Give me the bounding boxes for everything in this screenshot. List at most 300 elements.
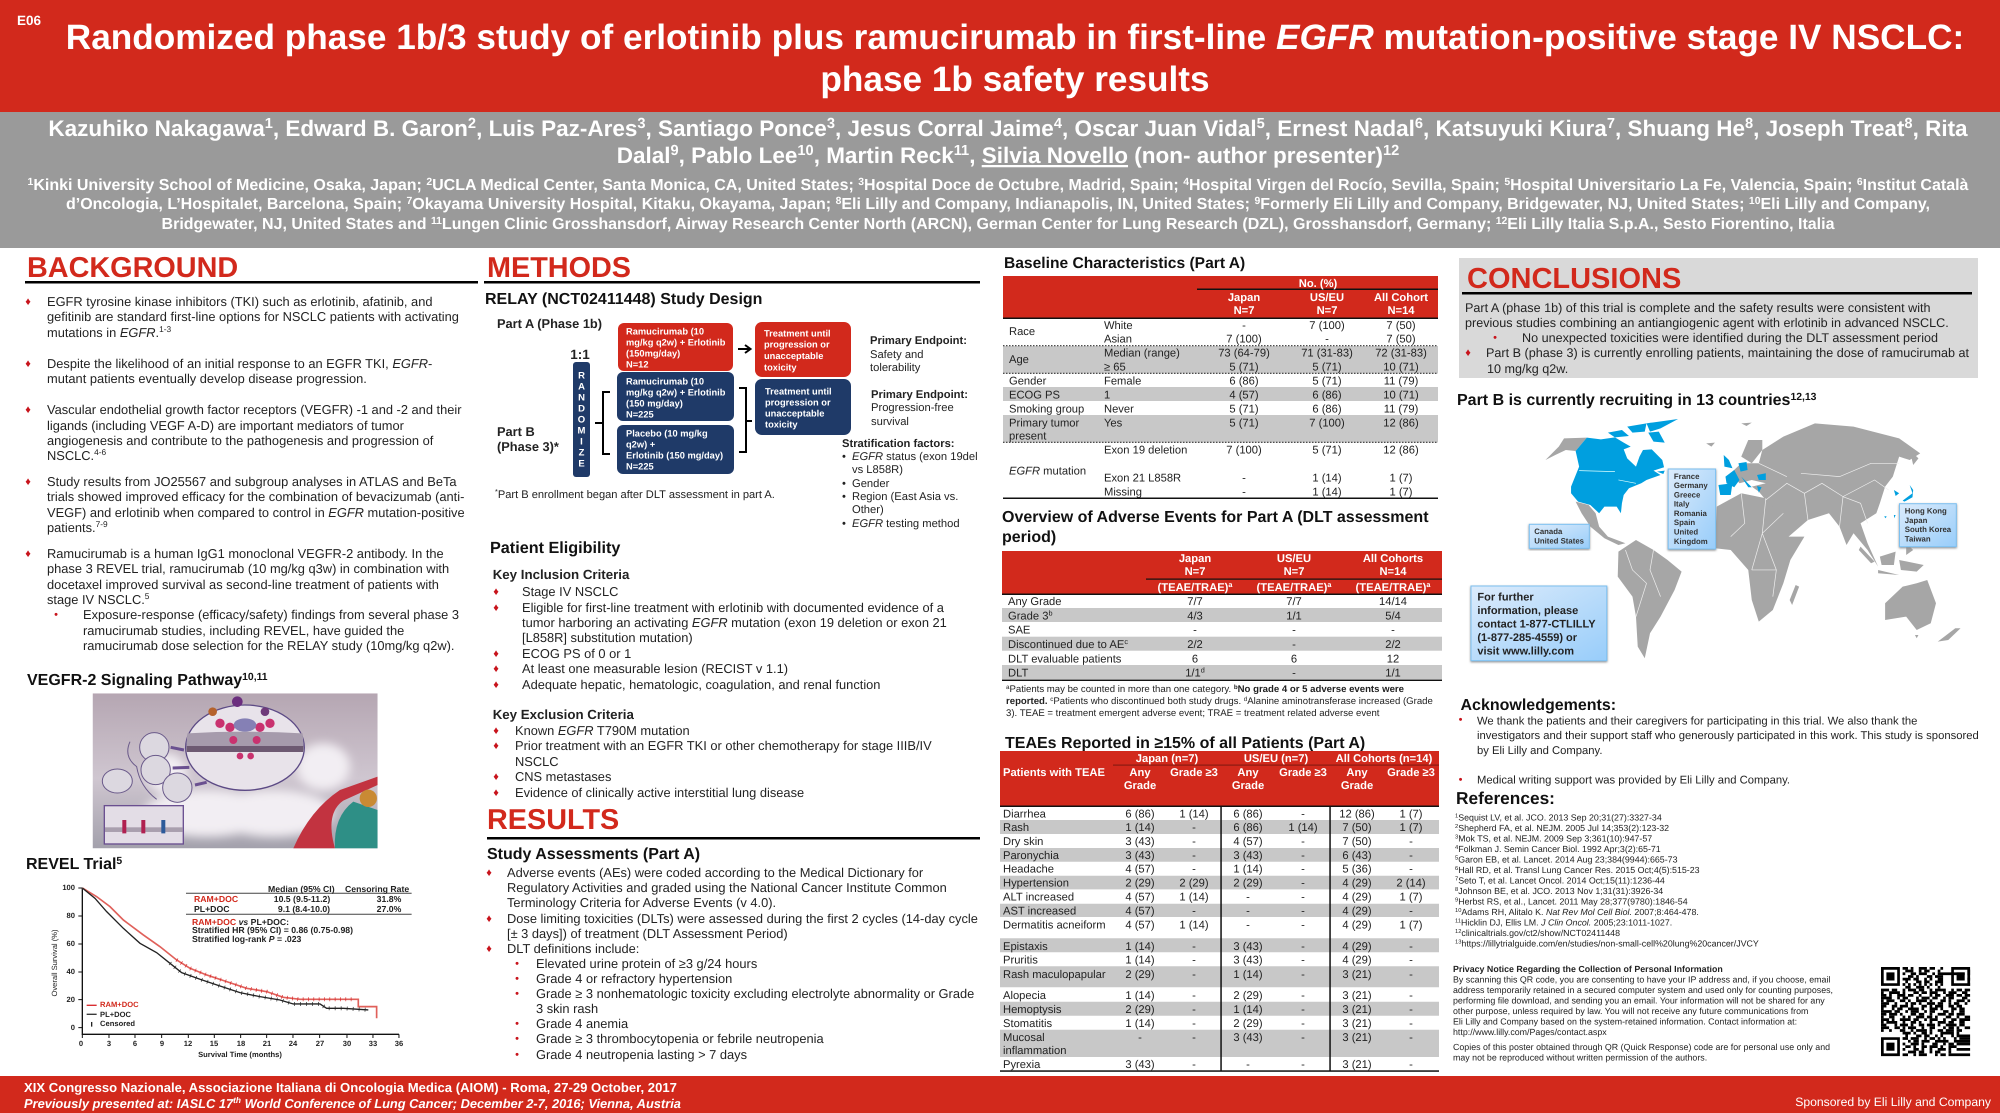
study assessments bullets: Grade ≥ 3 nonhematologic toxicity excluding electrolyte abnormality or Grade — [536, 986, 974, 1001]
background bullet 4: Study results from JO25567 and subgroup analyses in ATLAS and BeTa — [47, 474, 457, 489]
background bullet 2: mutant patients eventually develop disease progression. — [47, 371, 367, 386]
table header: All Cohorts — [1363, 553, 1423, 565]
inclusion criteria: ♦ — [493, 663, 499, 675]
acknowledgements text: by Eli Lilly and Company. — [1477, 745, 1602, 757]
acknowledgements text: We thank the patients and their caregivers for participating in this trial. We also thank the — [1477, 715, 1917, 727]
inclusion criteria: tumor harboring an activating EGFR mutation (exon 19 deletion or exon 21 — [522, 615, 947, 630]
table body: 1 (14) — [1312, 472, 1342, 484]
table body: 12 (86) — [1339, 808, 1375, 820]
table body: Dry skin — [1003, 836, 1043, 848]
table header: Japan — [1179, 553, 1211, 565]
background bullet 5: phase 3 REVEL trial, ramucirumab (10 mg/kg q3w) in combination with — [47, 561, 449, 576]
stratification factors: • — [842, 518, 846, 530]
table body: Gender — [1009, 376, 1047, 388]
table body: 3 (43) — [1233, 1032, 1263, 1044]
y axis labels: 60 — [67, 939, 75, 948]
chart stats table: RAM+DOC — [194, 894, 239, 904]
x axis labels: 27 — [316, 1039, 324, 1048]
table header: (TEAE/TRAE)a — [1257, 580, 1331, 594]
design footnote: *Part B enrollment began after DLT assessment in part A. — [495, 486, 775, 501]
table header: Any — [1346, 767, 1368, 779]
randomize bar: E — [578, 458, 585, 470]
table header: N=7 — [1185, 566, 1205, 578]
background bullet 5: ramucirumab dose selection for the RELAY study (10mg/kg q2w). — [83, 638, 454, 653]
table body: - — [1301, 892, 1305, 904]
table footnote: reported. cPatients who discontinued both study drugs. dAlanine aminotransferase increased (Grade — [1006, 696, 1433, 707]
background bullet 4: trials showed improved efficacy for the combination of bevacizumab (anti- — [47, 489, 464, 504]
subheading: study assessments: Study Assessments (Part A) — [487, 846, 700, 863]
arm box: part B placebo: Placebo (10 mg/kg — [626, 428, 708, 438]
table body: - — [1409, 1018, 1413, 1030]
table body: 7/7 — [1187, 596, 1203, 608]
reference list: 6Hall RD, et al. Transl Lung Cancer Res. 2015 Oct;4(5):515-23 — [1455, 865, 1700, 875]
table body: - — [1192, 836, 1196, 848]
y axis labels: 0 — [71, 1023, 75, 1032]
table body: 1/1 — [1385, 668, 1401, 680]
background bullet 3: NSCLC.4-6 — [47, 447, 106, 463]
table header: Patients with TEAE — [1003, 767, 1105, 779]
table body: Race — [1009, 326, 1035, 338]
y axis labels — [62, 883, 75, 1032]
meeting text: Previously presented at: IASLC 17th World Conference of Lung Cancer; December 2-7, 2016; Vienna, Austria — [24, 1095, 681, 1111]
background bullet 5: docetaxel improved survival as second-line treatment of patients with — [47, 577, 439, 592]
exclusion criteria: Key Exclusion Criteria — [493, 707, 634, 722]
callout: further information: information, please — [1477, 605, 1578, 617]
table header: Any — [1237, 767, 1259, 779]
table header: Grade — [1232, 780, 1264, 792]
table body: 4 (57) — [1125, 892, 1155, 904]
inclusion criteria — [493, 567, 947, 692]
callout: further information: contact 1-877-CTLILLY — [1477, 618, 1596, 630]
table body: 1 (7) — [1399, 808, 1423, 820]
arm box: part B treatment: progression or — [765, 398, 831, 408]
table body: - — [1301, 955, 1305, 967]
table body: - — [1301, 920, 1305, 932]
table footnote: aPatients may be counted in more than one category. bNo grade 4 or 5 adverse events were — [1006, 684, 1404, 695]
title: Randomized phase 1b/3 study of erlotinib plus ramucirumab in first-line EGFR mutation-positive stage IV NSCLC: — [66, 18, 1964, 57]
study assessments bullets: Grade 4 anemia — [536, 1016, 629, 1031]
table body: 7 (100) — [1226, 445, 1262, 457]
heading: recruiting countries: Part B is currently recruiting in 13 countries12,13 — [1457, 392, 1817, 409]
table header: N=7 — [1284, 566, 1304, 578]
table body: - — [1301, 836, 1305, 848]
table body: DLT — [1008, 668, 1028, 680]
authors: Kazuhiko Nakagawa1, Edward B. Garon2, Luis Paz-Ares3, Santiago Ponce3, Jesus Corral Jaime4, Oscar Juan Vidal5, Ernest Nadal6, Katsuyuki Kiura7, Shuang He8, Joseph Treat8, Rita — [48, 116, 1968, 141]
table body: - — [1242, 320, 1246, 332]
table header: Grade ≥3 — [1170, 767, 1218, 779]
conclusions text: • — [1493, 332, 1497, 344]
study assessments bullets: [± 3 days]) of treatment (DLT Assessment Period) — [507, 926, 788, 941]
exclusion criteria: Evidence of clinically active interstitial lung disease — [515, 785, 804, 800]
background bullet 3: ligands (including VEGF A-D) are important mediators of tumor — [47, 418, 405, 433]
table body: Dermatitis acneiform — [1003, 920, 1106, 932]
title banner — [0, 0, 2000, 112]
background bullet 1: gefitinib are standard first-line options for NSCLC patients with activating — [47, 309, 459, 324]
table body: - — [1192, 990, 1196, 1002]
randomize bar: I — [580, 436, 583, 448]
brackets — [595, 388, 752, 454]
table body: 3 (43) — [1233, 941, 1263, 953]
table body: - — [1192, 822, 1196, 834]
table body: Mucosal — [1003, 1032, 1045, 1044]
table body: Smoking group — [1009, 403, 1084, 415]
heading: adverse events overview: period) — [1002, 529, 1056, 546]
table body: 1 (7) — [1399, 920, 1423, 932]
table body: 12 (86) — [1383, 445, 1419, 457]
table body: 1/1 — [1286, 610, 1302, 622]
table body: Yes — [1104, 417, 1123, 429]
table body: 7 (100) — [1226, 334, 1262, 346]
table body: 4 (57) — [1125, 906, 1155, 918]
reference list: 12clinicaltrials.gov/ct2/show/NCT02411448 — [1455, 928, 1620, 938]
table body: 4 (29) — [1342, 906, 1372, 918]
study assessments bullets: • — [515, 1033, 519, 1045]
map label: Europe: France — [1674, 472, 1700, 481]
diagram: study design: Part B — [497, 424, 535, 439]
table body: Female — [1104, 376, 1141, 388]
background bullet 1: ♦ — [25, 296, 31, 308]
table body: AST increased — [1003, 906, 1076, 918]
table body: - — [1301, 1059, 1305, 1071]
affiliations: 1Kinki University School of Medicine, Osaka, Japan; 2UCLA Medical Center, Santa Monica, CA, United States; 3Hospital Doce de Octubre, Madrid, Spain; 4Hospital Virgen del Rocío, Sevilla, Spain; 5Hospital Universitario La Fe, Valencia, Spain; 6Institut Català — [28, 176, 1968, 194]
inclusion criteria: Stage IV NSCLC — [522, 584, 618, 599]
background bullet 5: ramucirumab studies, including REVEL, have guided the — [83, 623, 404, 638]
table header — [1002, 551, 1442, 595]
background bullet 5: Ramucirumab is a human IgG1 monoclonal VEGFR-2 antibody. In the — [47, 546, 444, 561]
chart: REVEL Kaplan-Meier survival — [50, 883, 412, 1059]
table body: 1 (14) — [1125, 941, 1155, 953]
x axis labels: 30 — [343, 1039, 351, 1048]
table header: N=14 — [1387, 305, 1415, 317]
map label: Europe: Germany — [1674, 481, 1708, 490]
table body: - — [1192, 850, 1196, 862]
privacy notice: address temporarily retained in a secured computer system and used only for counting purposes, — [1453, 985, 1833, 995]
arm box: part B ramucirumab: mg/kg q2w) + Erlotinib — [626, 388, 726, 398]
stratification factors — [842, 438, 978, 530]
table body: - — [1301, 1018, 1305, 1030]
exclusion criteria: CNS metastases — [515, 769, 611, 784]
heading: conclusions: CONCLUSIONS — [1467, 263, 1681, 295]
heading: VEGFR-2 pathway: VEGFR-2 Signaling Pathway10,11 — [27, 672, 268, 689]
study assessments bullets: • — [515, 1018, 519, 1030]
stratification factors: • — [842, 451, 846, 463]
panel: conclusions — [1459, 258, 1978, 378]
heading: background: BACKGROUND — [27, 252, 238, 284]
table body: 3 (43) — [1125, 1059, 1155, 1071]
conclusions text: No unexpected toxicities were identified during the DLT assessment period — [1522, 331, 1938, 345]
table body: - — [1138, 1032, 1142, 1044]
table body: 73 (64-79) — [1218, 348, 1270, 360]
table body: 1 (14) — [1233, 969, 1263, 981]
table body: 1 (14) — [1125, 822, 1155, 834]
table body: 1 — [1104, 389, 1110, 401]
map label: Europe: Italy — [1674, 500, 1690, 508]
reference list: 10Adams RH, Alitalo K. Nat Rev Mol Cell Biol. 2007;8:464-478. — [1455, 907, 1699, 917]
arm box: part B placebo: Erlotinib (150 mg/day) — [626, 450, 723, 460]
background bullet 4: patients.7-9 — [47, 519, 108, 535]
x axis labels: 3 — [107, 1039, 111, 1048]
map label: Europe: United — [1674, 528, 1698, 536]
arm box: part B treatment: Treatment until — [765, 386, 832, 396]
reference list: 1Sequist LV, et al. JCO. 2013 Sep 20;31(27):3327-34 — [1455, 812, 1662, 822]
conclusions text: Part B (phase 3) is currently enrolling patients, maintaining the dose of ramucirumab at — [1486, 346, 1970, 360]
table body: 3 (43) — [1233, 955, 1263, 967]
table body: 3 (21) — [1342, 1032, 1372, 1044]
primary endpoint B: Primary Endpoint: — [871, 389, 968, 401]
table body: 5 (71) — [1312, 445, 1342, 457]
randomize bar — [573, 362, 590, 477]
arm box: part A treatment: progression or — [764, 340, 830, 350]
chart legend: Censored — [100, 1019, 135, 1028]
study assessments bullets: • — [515, 958, 519, 970]
heading: results: RESULTS — [487, 804, 619, 836]
table body: - — [1192, 969, 1196, 981]
background bullet 5: stage IV NSCLC.5 — [47, 591, 149, 607]
table body: Grade 3b — [1008, 608, 1052, 622]
table header: (TEAE/TRAE)a — [1158, 580, 1232, 594]
table body: Rash — [1003, 822, 1029, 834]
map label: Europe: Spain — [1674, 518, 1695, 527]
exclusion criteria: Prior treatment with an EGFR TKI or other chemotherapy for stage IIIB/IV — [515, 738, 932, 753]
callout: further information: (1-877-285-4559) or — [1477, 632, 1578, 644]
primary endpoint A — [870, 335, 967, 374]
arm box: part B ramucirumab — [617, 372, 734, 421]
table header: N=7 — [1234, 305, 1254, 317]
table body: White — [1104, 320, 1133, 332]
table body: SAE — [1008, 625, 1030, 637]
study assessments bullets: Adverse events (AEs) were coded according to the Medical Dictionary for — [507, 865, 924, 880]
privacy notice: may not be reproduced without written permission of the authors. — [1453, 1052, 1707, 1062]
table body: Epistaxis — [1003, 941, 1048, 953]
x axis labels: 24 — [289, 1039, 298, 1048]
table body — [1003, 320, 1438, 499]
table footnote: 3). TEAE = treatment emergent adverse event; TRAE = treatment related adverse event — [1006, 708, 1380, 719]
callout: further information: visit www.lilly.com — [1477, 645, 1574, 657]
table body: 1 (14) — [1312, 486, 1342, 498]
diagram: study design: (Phase 3)* — [497, 439, 559, 454]
country borders — [1625, 463, 1899, 617]
table header: Grade ≥3 — [1387, 767, 1435, 779]
study assessments bullets: • — [515, 1049, 519, 1061]
table body: - — [1192, 864, 1196, 876]
conclusions text: Part A (phase 1b) of this trial is complete and the safety results were consistent with — [1465, 301, 1930, 315]
privacy notice: http://www.lilly.com/Pages/contact.aspx — [1453, 1027, 1607, 1037]
privacy notice: Copies of this poster obtained through QR (Quick Response) code are for personal use only and — [1453, 1042, 1830, 1052]
chart stats table: Median (95% CI) — [268, 884, 335, 894]
background bullet 4: ♦ — [25, 476, 31, 488]
x axis labels: 15 — [210, 1039, 219, 1048]
reference list: 13https://lillytrialguide.com/en/studies/non-small-cell%20lung%20cancer/JVCY — [1455, 939, 1759, 949]
table body: 4 (29) — [1342, 955, 1372, 967]
panel: adverse events overview — [1002, 509, 1442, 719]
table body: - — [1409, 955, 1413, 967]
table body: Never — [1104, 403, 1134, 415]
table header: Japan (n=7) — [1136, 753, 1199, 765]
arm box: part B placebo — [617, 425, 734, 474]
arm box: part A ramucirumab: mg/kg q2w) + Erlotinib — [626, 338, 726, 348]
reference list: 11Hicklin DJ, Ellis LM. J Clin Oncol. 2005;23:1011-1027. — [1455, 918, 1672, 928]
affiliations: Bridgewater, NJ, United States and 11Lungen Clinic Grosshansdorf, Airway Research Center North (ARCN), German Center for Lung Research (DZL), Grosshansdorf, Germany; 12Eli Lilly Italia S.p.A., Sesto Fiorentino, Italia — [162, 216, 1834, 233]
randomize bar: M — [578, 426, 586, 436]
table body: 11 (79) — [1384, 376, 1419, 388]
table body: - — [1246, 1059, 1250, 1071]
stratification factors: Other) — [852, 504, 884, 516]
chart stats table: 31.8% — [377, 894, 402, 904]
table body: EGFR mutation — [1009, 465, 1086, 477]
table body: 7 (100) — [1309, 320, 1345, 332]
table body: - — [1246, 920, 1250, 932]
inclusion criteria: ECOG PS of 0 or 1 — [522, 646, 631, 661]
table body: 2 (14) — [1396, 878, 1426, 890]
table body: 1 (7) — [1399, 822, 1423, 834]
heading: adverse events overview: Overview of Adverse Events for Part A (DLT assessment — [1002, 509, 1429, 526]
table body: 5 (71) — [1312, 362, 1342, 374]
inclusion criteria: Eligible for first-line treatment with erlotinib with documented evidence of a — [522, 600, 945, 615]
table body: 1 (14) — [1233, 864, 1263, 876]
map label: North America — [1529, 524, 1589, 548]
table body: 7 (50) — [1386, 334, 1416, 346]
chart legend: RAM+DOC — [100, 1000, 139, 1009]
randomize bar: A — [578, 382, 585, 392]
conclusions text: previous studies combining an antiangiogenic agent with erlotinib in advanced NSCLC. — [1465, 316, 1949, 330]
heading: TEAEs: TEAEs Reported in ≥15% of all Patients (Part A) — [1005, 735, 1365, 752]
panel: TEAEs table — [1000, 735, 1439, 1072]
table header — [1000, 751, 1439, 807]
exclusion criteria: NSCLC — [515, 754, 559, 769]
exclusion criteria: ♦ — [493, 725, 499, 737]
table body: 3 (43) — [1233, 850, 1263, 862]
x axis labels: 9 — [160, 1039, 164, 1048]
reference list: 5Garon EB, et al. Lancet. 2014 Aug 23;384(9944):665-73 — [1455, 854, 1678, 864]
acknowledgements text: investigators and their support staff who generously participated in this work. This study is sponsored — [1477, 730, 1979, 742]
exclusion criteria: ♦ — [493, 787, 499, 799]
table body: - — [1242, 486, 1246, 498]
table body: - — [1301, 850, 1305, 862]
stratification factors: EGFR testing method — [852, 518, 960, 530]
y axis labels: 100 — [62, 883, 75, 892]
map label: Asia: Hong Kong — [1905, 507, 1947, 516]
table header: US/EU — [1310, 292, 1344, 304]
table body: Pruritis — [1003, 955, 1038, 967]
table body: Hemoptysis — [1003, 1004, 1062, 1016]
table header: Grade ≥3 — [1279, 767, 1327, 779]
title: phase 1b safety results — [820, 60, 1210, 99]
study assessments bullets: ♦ — [486, 867, 492, 879]
study assessments bullets: Regulatory Activities and graded using the National Cancer Institute Common — [507, 880, 947, 895]
table body: - — [1301, 878, 1305, 890]
panel: results — [486, 804, 980, 1062]
table body: ALT increased — [1003, 892, 1074, 904]
table body: - — [1409, 864, 1413, 876]
privacy notice — [1453, 964, 1833, 1062]
stratification factors: EGFR status (exon 19del — [852, 451, 978, 463]
reference list: 4Folkman J. Semin Cancer Biol. 1992 Apr;3(2):65-71 — [1455, 844, 1661, 854]
table body: - — [1409, 941, 1413, 953]
table body: ECOG PS — [1009, 389, 1060, 401]
primary endpoint A: tolerability — [870, 362, 921, 374]
acknowledgements text: • — [1459, 714, 1463, 726]
table body: 3 (21) — [1342, 969, 1372, 981]
table body: inflammation — [1003, 1045, 1066, 1057]
table body: 5 (71) — [1229, 362, 1259, 374]
table body: 2 (29) — [1125, 969, 1155, 981]
table body: present — [1009, 431, 1047, 443]
table header: N=14 — [1379, 566, 1407, 578]
chart stats table: Stratified HR (95% CI) = 0.86 (0.75-0.98) — [192, 925, 353, 935]
background bullet 5: • — [54, 609, 58, 621]
table body: - — [1292, 668, 1296, 680]
table body: 6 (86) — [1312, 389, 1342, 401]
inclusion criteria: ♦ — [493, 679, 499, 691]
chart stats table: Stratified log-rank P = .023 — [192, 934, 302, 944]
privacy notice: performing file download, and sending you an email. Your information will not be shared for any — [1453, 996, 1825, 1006]
table body: 1 (14) — [1125, 990, 1155, 1002]
table body: 10 (71) — [1383, 362, 1419, 374]
table body: Hypertension — [1003, 878, 1069, 890]
conclusions text — [1465, 301, 1970, 376]
callout: further information — [1471, 586, 1607, 661]
primary endpoint B — [871, 389, 968, 428]
stratification factors: Region (East Asia vs. — [852, 491, 958, 503]
table body: Exon 21 L858R — [1104, 472, 1181, 484]
land masses — [1545, 423, 1961, 658]
table body: 6 (86) — [1312, 403, 1342, 415]
table body: 7 (100) — [1309, 417, 1345, 429]
map label: Europe: Greece — [1674, 490, 1701, 500]
table header: N=7 — [1317, 305, 1337, 317]
map label: Asia: South Korea — [1905, 525, 1952, 534]
panel: references — [1455, 788, 1759, 949]
study assessments bullets: Terminology Criteria for Adverse Events (v 4.0). — [507, 895, 776, 910]
map label: Asia: Taiwan — [1905, 534, 1931, 543]
chart stats table: 9.1 (8.4-10.0) — [278, 904, 330, 914]
arm box: part B treatment: toxicity — [765, 420, 798, 430]
table body: Asian — [1104, 334, 1132, 346]
y axis labels: 80 — [67, 911, 75, 920]
table body: 11 (79) — [1384, 403, 1419, 415]
conclusions text: 10 mg/kg q2w. — [1487, 362, 1568, 376]
arm box: part A treatment — [755, 322, 851, 377]
table header: All Cohorts (n=14) — [1336, 753, 1433, 765]
background bullet 5: Exposure-response (efficacy/safety) findings from several phase 3 — [83, 607, 459, 622]
heading: baseline characteristics: Baseline Characteristics (Part A) — [1004, 255, 1245, 272]
table header: Japan — [1228, 292, 1260, 304]
table body: Median (range) — [1104, 348, 1180, 360]
table header: US/EU — [1277, 553, 1311, 565]
table body: 6 (86) — [1233, 808, 1263, 820]
table body: - — [1391, 625, 1395, 637]
map label: North America: Canada — [1534, 527, 1563, 536]
table body: - — [1192, 1032, 1196, 1044]
stratification factors: Stratification factors: — [842, 438, 955, 450]
y axis labels: 40 — [67, 967, 75, 976]
table body: - — [1192, 1059, 1196, 1071]
table header: Grade — [1124, 780, 1156, 792]
arm box: part A ramucirumab: N=12 — [626, 360, 648, 370]
table body: - — [1301, 808, 1305, 820]
meeting text: XIX Congresso Nazionale, Associazione Italiana di Oncologia Medica (AIOM) - Roma, 27-29 October, 2017 — [24, 1080, 677, 1095]
table body: Any Grade — [1008, 596, 1061, 608]
study assessments bullets: ♦ — [486, 943, 492, 955]
table body: 6 (86) — [1229, 376, 1259, 388]
privacy notice: other purpose, unless required by law. You will not receive any future communications from — [1453, 1006, 1808, 1016]
table body: Discontinued due to AEc — [1008, 636, 1128, 651]
diagram: study design — [495, 316, 978, 530]
world map — [1545, 419, 1961, 658]
table body: ≥ 65 — [1104, 362, 1126, 374]
chart legend: PL+DOC — [100, 1010, 132, 1019]
x axis labels: 12 — [184, 1039, 192, 1048]
